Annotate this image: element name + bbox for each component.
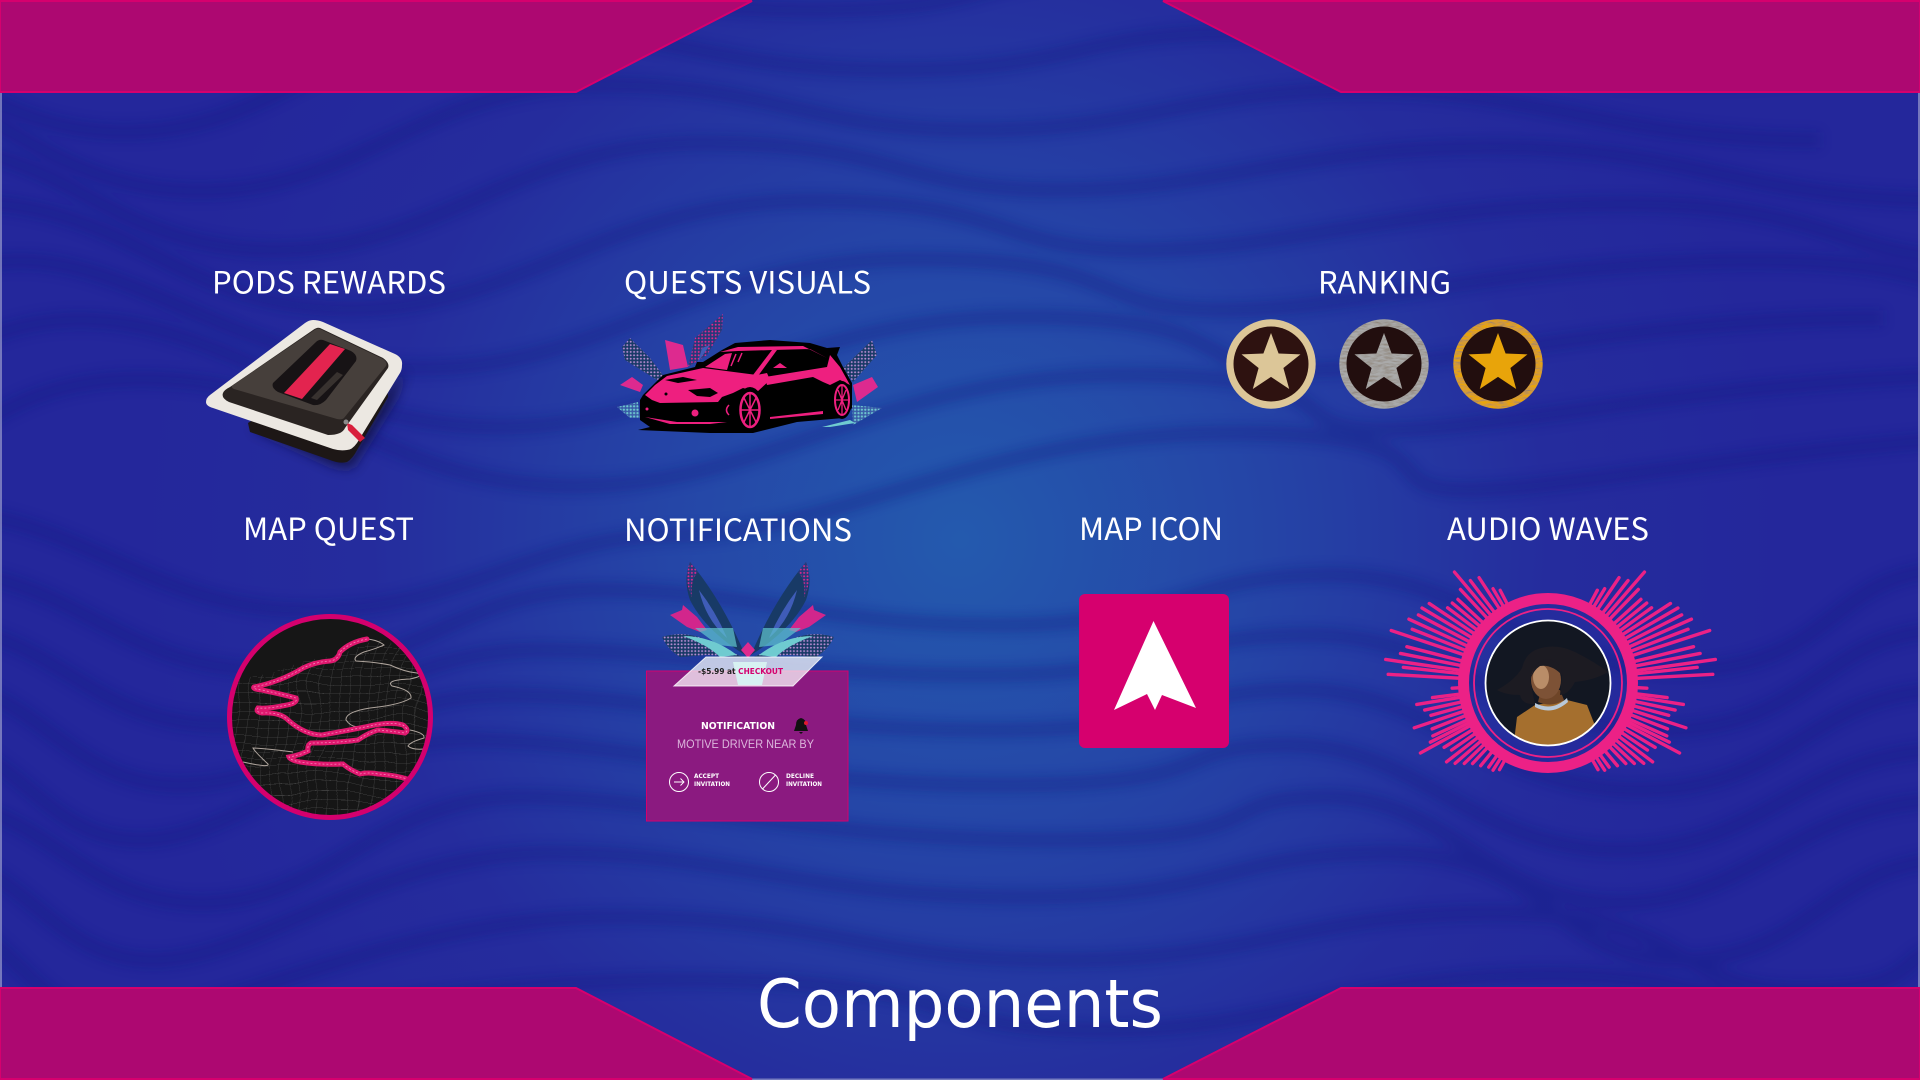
notification title: NOTIFICATION xyxy=(701,721,775,732)
ribbon: bottom right xyxy=(1163,988,1920,1079)
action: decline: INVITATION xyxy=(786,781,822,788)
icon: bell xyxy=(794,718,808,734)
feathers: right xyxy=(751,562,834,657)
action: accept: INVITATION xyxy=(694,781,730,788)
action: decline xyxy=(760,772,822,792)
action: accept xyxy=(670,772,730,792)
notification message: MOTIVE DRIVER NEAR BY xyxy=(677,737,814,751)
ribbon: top left xyxy=(0,1,752,92)
map quest circle xyxy=(227,614,433,820)
illustration: car with feathers xyxy=(617,314,882,433)
title: Components xyxy=(757,965,1163,1043)
price tag: -$5.99 at CHECKOUT xyxy=(698,667,783,676)
portrait xyxy=(1486,621,1610,745)
heading: notifications: NOTIFICATIONS xyxy=(624,505,852,550)
heading: quests visuals: QUESTS VISUALS xyxy=(624,258,871,302)
action: decline: DECLINE xyxy=(786,773,814,780)
icon: gold medal xyxy=(1453,319,1543,409)
price tag xyxy=(674,657,822,686)
action: accept: ACCEPT xyxy=(694,773,720,780)
heading: map icon: MAP ICON xyxy=(1079,504,1223,549)
audio wave avatar xyxy=(1386,572,1715,770)
radial bars xyxy=(1386,572,1715,770)
icon: pod reward xyxy=(206,320,405,468)
heading: ranking: RANKING xyxy=(1318,258,1451,302)
card body xyxy=(646,671,848,821)
feathers: left xyxy=(662,562,745,657)
heading: pods rewards: PODS REWARDS xyxy=(212,258,446,302)
icon: bronze medal xyxy=(1226,319,1316,409)
ribbon: bottom left xyxy=(0,988,752,1079)
icon: silver medal xyxy=(1339,319,1429,409)
ribbon: top right xyxy=(1163,1,1920,92)
heading: audio waves: AUDIO WAVES xyxy=(1447,504,1649,549)
heading: map quest: MAP QUEST xyxy=(243,504,414,549)
notification card xyxy=(646,562,848,821)
icon: map arrow xyxy=(1079,594,1229,748)
